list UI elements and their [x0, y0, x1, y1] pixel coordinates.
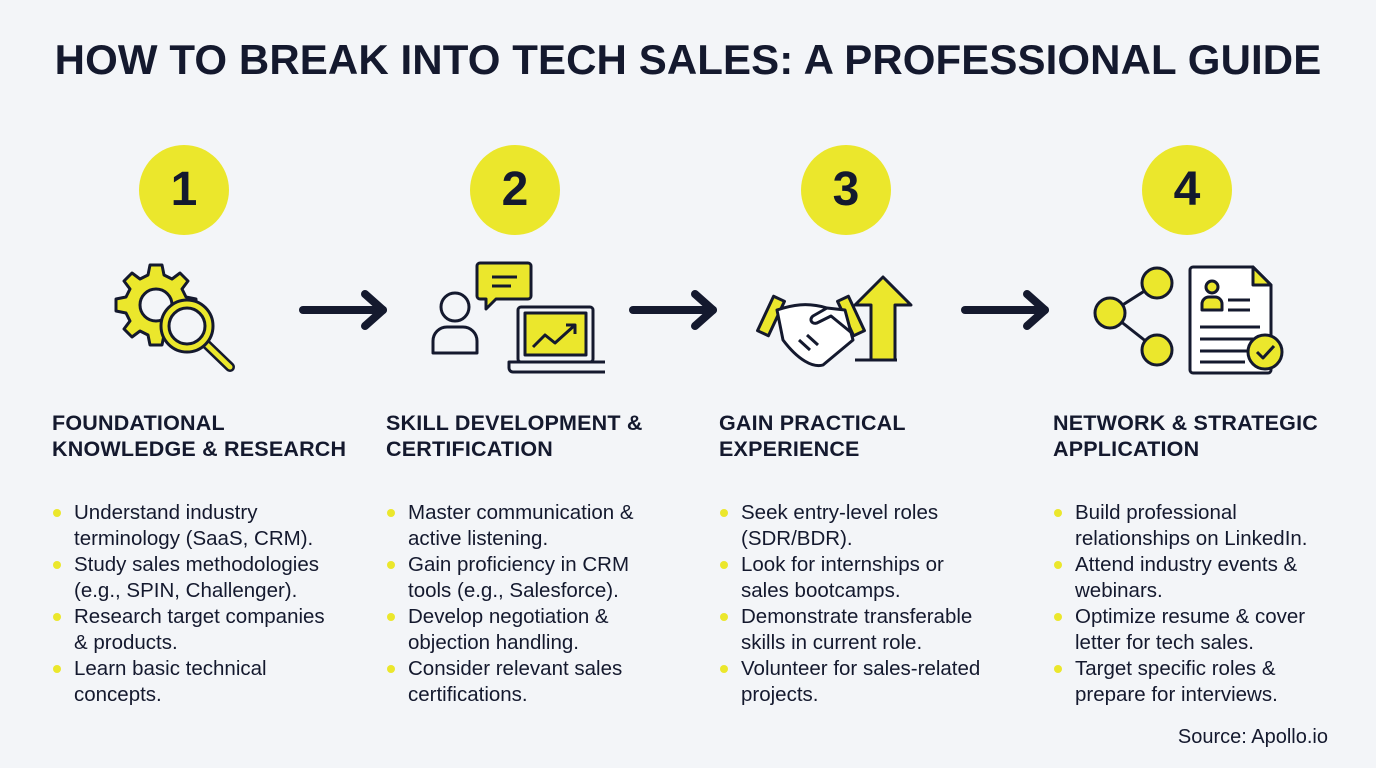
source note: Source: Apollo.io: [1178, 726, 1328, 748]
title: HOW TO BREAK INTO TECH SALES: A PROFESSIONAL GUIDE: [55, 36, 1321, 83]
column 4: network & application: NETWORK & STRATEGIC: [1053, 411, 1318, 435]
column 2: skill development: SKILL DEVELOPMENT &: [386, 411, 643, 435]
column 1: foundational knowledge: FOUNDATIONAL: [52, 411, 225, 435]
icon: gear with magnifier: [114, 264, 235, 372]
column 1: foundational knowledge: Research target companies: [74, 605, 325, 628]
column 2: skill development: CERTIFICATION: [386, 437, 553, 461]
column 1: foundational knowledge: concepts.: [74, 683, 162, 706]
column 1: foundational knowledge: Study sales methodologies: [74, 553, 319, 576]
step number 2: 2: [502, 163, 528, 216]
column 2: skill development: active listening.: [408, 527, 548, 550]
step number 4: [1142, 145, 1232, 235]
column 3: practical experience: projects.: [741, 683, 818, 706]
step number 3: 3: [833, 163, 859, 216]
column 3: practical experience: Look for internships or: [741, 553, 944, 576]
icon: person, chat and laptop: [432, 262, 605, 374]
step number 3: [801, 145, 891, 235]
column 1: foundational knowledge: (e.g., SPIN, Challenger).: [74, 579, 297, 602]
column 4: network & application: relationships on LinkedIn.: [1075, 527, 1308, 550]
column 2: skill development: certifications.: [408, 683, 528, 706]
column 1: foundational knowledge: KNOWLEDGE & RESEARCH: [52, 437, 346, 461]
step number 4: 4: [1174, 163, 1200, 216]
column 4: network & application: prepare for interviews.: [1075, 683, 1278, 706]
column 4: network & application: Target specific roles &: [1075, 657, 1276, 680]
arrow 2: [629, 290, 717, 330]
column 3: practical experience: [719, 411, 980, 706]
column 2: skill development: Consider relevant sales: [408, 657, 622, 680]
column 3: practical experience: (SDR/BDR).: [741, 527, 853, 550]
column 3: practical experience: GAIN PRACTICAL: [719, 411, 906, 435]
column 1: foundational knowledge: Understand industry: [74, 501, 257, 524]
column 2: skill development: Develop negotiation &: [408, 605, 609, 628]
column 3: practical experience: sales bootcamps.: [741, 579, 901, 602]
step number 1: 1: [171, 163, 197, 216]
column 3: practical experience: EXPERIENCE: [719, 437, 860, 461]
column 2: skill development: objection handling.: [408, 631, 579, 654]
column 2: skill development: tools (e.g., Salesforce).: [408, 579, 619, 602]
column 4: network & application: Build professional: [1075, 501, 1237, 524]
column 4: network & application: [1053, 411, 1318, 706]
icon: network and resume: [1094, 265, 1284, 374]
column 4: network & application: APPLICATION: [1053, 437, 1199, 461]
column 1: foundational knowledge: & products.: [74, 631, 178, 654]
column 2: skill development: [386, 411, 643, 706]
column 3: practical experience: Seek entry-level roles: [741, 501, 938, 524]
column 1: foundational knowledge: terminology (SaaS, CRM).: [74, 527, 313, 550]
icon: handshake with up arrow: [756, 275, 912, 368]
column 3: practical experience: Demonstrate transferable: [741, 605, 972, 628]
column 4: network & application: webinars.: [1075, 579, 1163, 602]
column 4: network & application: Attend industry events &: [1075, 553, 1297, 576]
column 3: practical experience: skills in current role.: [741, 631, 922, 654]
column 1: foundational knowledge: [52, 411, 346, 706]
column 3: practical experience: Volunteer for sales-related: [741, 657, 980, 680]
arrow 1: [299, 290, 387, 330]
arrow 3: [961, 290, 1049, 330]
column 1: foundational knowledge: Learn basic technical: [74, 657, 267, 680]
column 4: network & application: Optimize resume & cover: [1075, 605, 1305, 628]
column 2: skill development: Master communication &: [408, 501, 634, 524]
column 4: network & application: letter for tech sales.: [1075, 631, 1254, 654]
column 2: skill development: Gain proficiency in CRM: [408, 553, 629, 576]
step number 1: [139, 145, 229, 235]
step number 2: [470, 145, 560, 235]
